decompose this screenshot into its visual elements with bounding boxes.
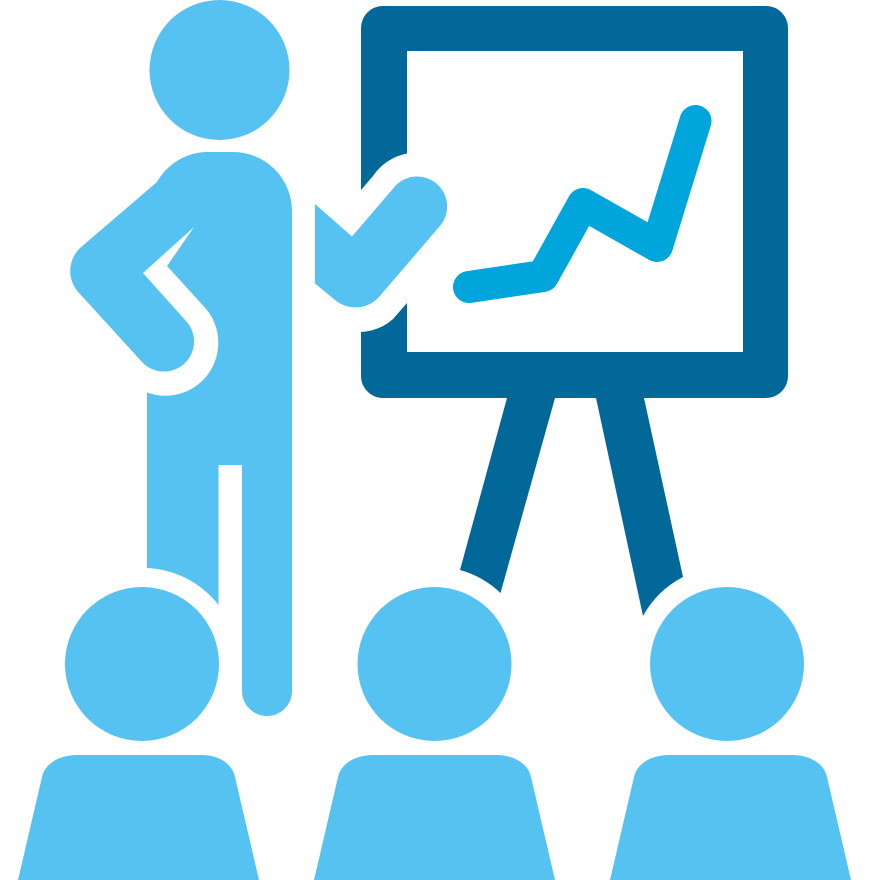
icon: chart line xyxy=(469,121,696,287)
icon: easel board xyxy=(361,6,788,616)
audience member right xyxy=(610,587,851,880)
presenter head xyxy=(150,0,290,140)
audience member center xyxy=(314,587,555,880)
icon: presenter xyxy=(70,0,447,716)
presenter body xyxy=(70,152,292,716)
audience member left xyxy=(18,587,259,880)
presenter pointing arm xyxy=(315,176,447,307)
